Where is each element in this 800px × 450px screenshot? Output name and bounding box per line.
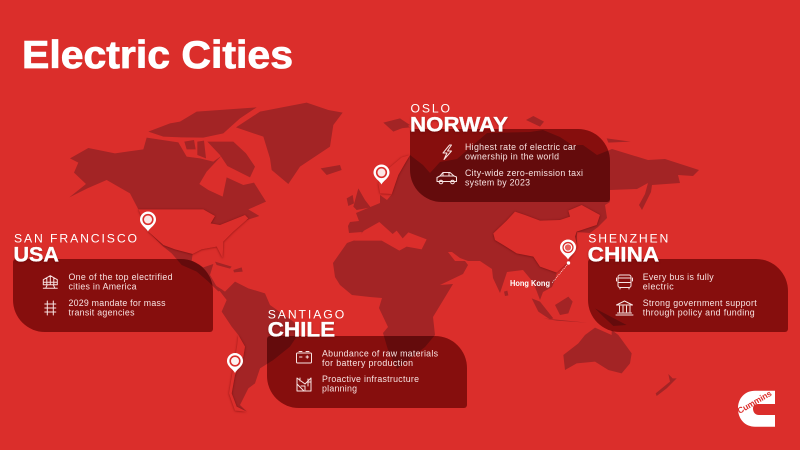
text: mandate: 2029 mandate for mass bbox=[68, 298, 166, 308]
highlighted country: Norway bbox=[378, 155, 410, 194]
country name: USA bbox=[14, 244, 59, 266]
panel background bbox=[13, 259, 213, 332]
title: Electric Cities bbox=[22, 34, 293, 77]
label: Hong Kong: Hong Kong bbox=[510, 278, 550, 288]
panel: Shenzhen: through policy and funding bbox=[643, 308, 755, 318]
panel: Oslo bbox=[410, 101, 610, 202]
panel: Santiago: for battery production bbox=[322, 358, 413, 368]
map: Eurasia and Africa bbox=[333, 130, 699, 369]
pin: Shenzhen with Hong Kong leader bbox=[552, 240, 576, 283]
icon: planning tools bbox=[297, 378, 311, 391]
map: British Isles and Arctic islands bbox=[347, 118, 410, 210]
text: infrastructure: Proactive infrastructure bbox=[322, 374, 419, 384]
panel: Oslo: ownership in the world bbox=[465, 152, 559, 162]
icon: battery bbox=[296, 352, 312, 363]
panel: Oslo: system by 2023 bbox=[465, 178, 530, 188]
city name: SHENZHEN bbox=[588, 232, 668, 246]
text: taxi system: City-wide zero-emission taxi bbox=[465, 168, 583, 178]
pin: Oslo bbox=[374, 164, 390, 184]
panel: San Francisco: cities in America bbox=[68, 282, 137, 292]
map: Arctic Russia islands bbox=[400, 116, 631, 143]
map: South America bbox=[215, 282, 298, 412]
panel: Santiago: planning bbox=[322, 384, 357, 394]
icon: electric tower bbox=[43, 276, 57, 288]
panel: Santiago bbox=[267, 307, 467, 408]
icon: lightning bolt bbox=[443, 145, 452, 160]
highlighted country: USA bbox=[138, 209, 248, 258]
city name: SANTIAGO bbox=[268, 307, 344, 321]
panel background bbox=[588, 259, 788, 332]
pin: San Francisco bbox=[140, 212, 156, 232]
country name: CHINA bbox=[588, 243, 659, 266]
city name: OSLO bbox=[410, 101, 450, 115]
country name: NORWAY bbox=[410, 114, 508, 136]
panel: Shenzhen: electric bbox=[643, 282, 674, 292]
pin: Santiago bbox=[227, 353, 243, 373]
highlighted country: China bbox=[493, 205, 600, 273]
text: car ownership: Highest rate of electric car bbox=[465, 142, 576, 152]
logo: Cummins: Cummins bbox=[736, 388, 774, 416]
country name: CHILE bbox=[268, 319, 335, 342]
panel: San Francisco bbox=[13, 232, 213, 332]
world map bbox=[69, 103, 699, 412]
text: government support: Strong government support bbox=[643, 298, 757, 308]
icon: rail tracks bbox=[45, 301, 56, 315]
text: top electrified: One of the top electrified bbox=[68, 272, 173, 282]
map: North America bbox=[69, 103, 343, 291]
icon: bus bbox=[616, 275, 632, 289]
map: Southeast Asia and Oceania bbox=[504, 291, 677, 396]
panel background bbox=[267, 336, 467, 408]
panel: San Francisco: transit agencies bbox=[68, 308, 135, 318]
text: raw materials: Abundance of raw materials bbox=[322, 348, 439, 358]
icon: car bbox=[437, 172, 456, 184]
panel background bbox=[410, 129, 610, 202]
icon: government building bbox=[616, 301, 633, 315]
logo: Cummins bbox=[736, 388, 775, 427]
map: Mediterranean bbox=[354, 222, 427, 251]
highlighted country: Chile bbox=[229, 335, 247, 412]
text: bus: Every bus is fully bbox=[643, 272, 714, 282]
panel: Shenzhen bbox=[588, 232, 788, 332]
city name: SAN FRANCISCO bbox=[14, 232, 137, 246]
